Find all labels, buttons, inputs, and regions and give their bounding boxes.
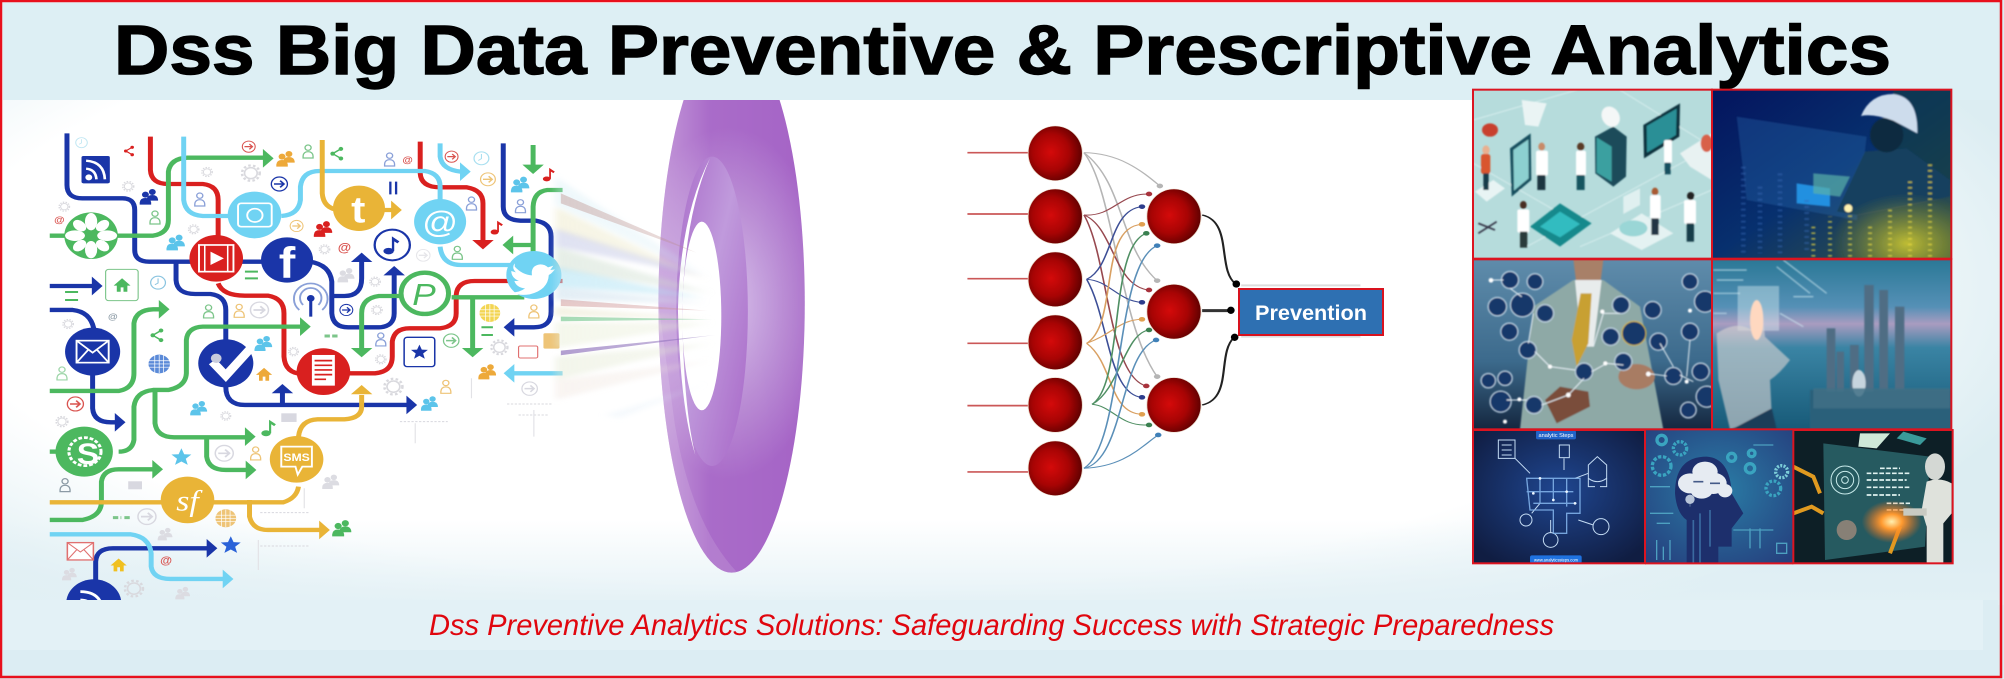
top title band	[3, 3, 1998, 100]
share, house, star, globe and note icons: @	[402, 156, 413, 166]
small person outlines	[57, 145, 539, 492]
neural network diagram	[967, 126, 1360, 496]
icon: pinterest ring: P	[412, 277, 436, 311]
navy data paths	[50, 133, 551, 587]
photo: analytic steps brain network	[1473, 430, 1645, 563]
subtitle caption: Dss Preventive Analytics Solutions: Safeguarding Success with Strategic Preparedness	[429, 609, 1554, 642]
photo: businessman with iot icons	[1473, 259, 1717, 429]
icon: facebook circle	[261, 237, 313, 287]
share, house, star, globe and note icons	[54, 146, 560, 571]
icon: twitter circle	[506, 251, 561, 299]
photo: engineer with hard hat	[1713, 90, 1950, 258]
title: Dss Big Data Preventive & Prescriptive Analytics	[114, 11, 1891, 89]
icon: facebook circle: f	[279, 238, 296, 287]
connections orange	[1087, 224, 1142, 414]
hidden layer nodes	[1147, 189, 1201, 432]
connections green	[1092, 233, 1149, 425]
connections blue	[1084, 246, 1158, 468]
icon: tumblr circle	[333, 186, 385, 231]
connections red	[1084, 194, 1149, 386]
connections navy	[1087, 207, 1142, 397]
photo: robot and industrial hud	[1793, 430, 1953, 563]
small gears	[56, 165, 507, 596]
yellow data paths	[50, 140, 394, 530]
small people icons	[62, 151, 529, 599]
icon: S gear circle	[55, 427, 113, 477]
rss icon top left	[82, 156, 110, 183]
icon: bottom rss circle	[66, 579, 121, 600]
image collage	[1473, 90, 1983, 563]
input layer nodes	[1028, 126, 1082, 496]
collage red frames	[1473, 90, 1953, 563]
photo: analytic steps brain network: www.analyticssteps.com	[1534, 557, 1578, 562]
icon: pinterest ring	[401, 273, 449, 314]
output connectors	[1202, 215, 1360, 405]
icon: green flower circle	[64, 212, 118, 259]
icon: tumblr circle: t	[351, 189, 365, 231]
icon: at-sign circle: @	[422, 205, 458, 239]
bottom caption band	[3, 600, 1998, 674]
icon: SMS circle	[270, 436, 323, 483]
photo: digital health isometric	[1473, 90, 1713, 258]
icon: mail circle	[65, 328, 120, 376]
connection end dots	[1139, 184, 1163, 437]
icon: camera circle	[228, 192, 281, 238]
prevention box: Prevention	[1255, 302, 1367, 325]
icon: sf circle: sf	[176, 485, 203, 517]
share, house, star, globe and note icons: @	[108, 312, 118, 321]
icon: red video circle	[189, 235, 243, 282]
small circled arrows and clocks	[67, 138, 537, 524]
share, house, star, globe and note icons: @	[338, 240, 351, 254]
connections grey	[1084, 153, 1160, 377]
share, house, star, globe and note icons: @	[160, 556, 172, 567]
photo: analytic steps brain network: analytic Steps	[1538, 433, 1574, 439]
red data paths	[150, 137, 563, 374]
share, house, star, globe and note icons: @	[54, 216, 65, 226]
coloured light rays entering lens	[555, 177, 715, 418]
icon: document circle	[297, 348, 350, 395]
icon: sf circle	[161, 477, 214, 523]
green data paths	[50, 145, 563, 520]
big data social network illustration	[50, 133, 563, 627]
icon: at-sign circle	[414, 199, 466, 244]
cyan data paths	[50, 137, 563, 579]
icon: S gear circle: S	[77, 437, 99, 470]
arrow heads	[92, 253, 514, 558]
input lines	[967, 153, 1030, 472]
icon: music note ring	[375, 230, 410, 260]
icon: SMS circle: SMS	[283, 453, 310, 464]
icon: check circle	[198, 339, 253, 387]
purple lens disc	[658, 34, 805, 573]
prevention box	[1239, 289, 1383, 335]
photo: ai head with gears	[1645, 430, 1793, 563]
photo: refinery with touch hand	[1712, 259, 1952, 429]
